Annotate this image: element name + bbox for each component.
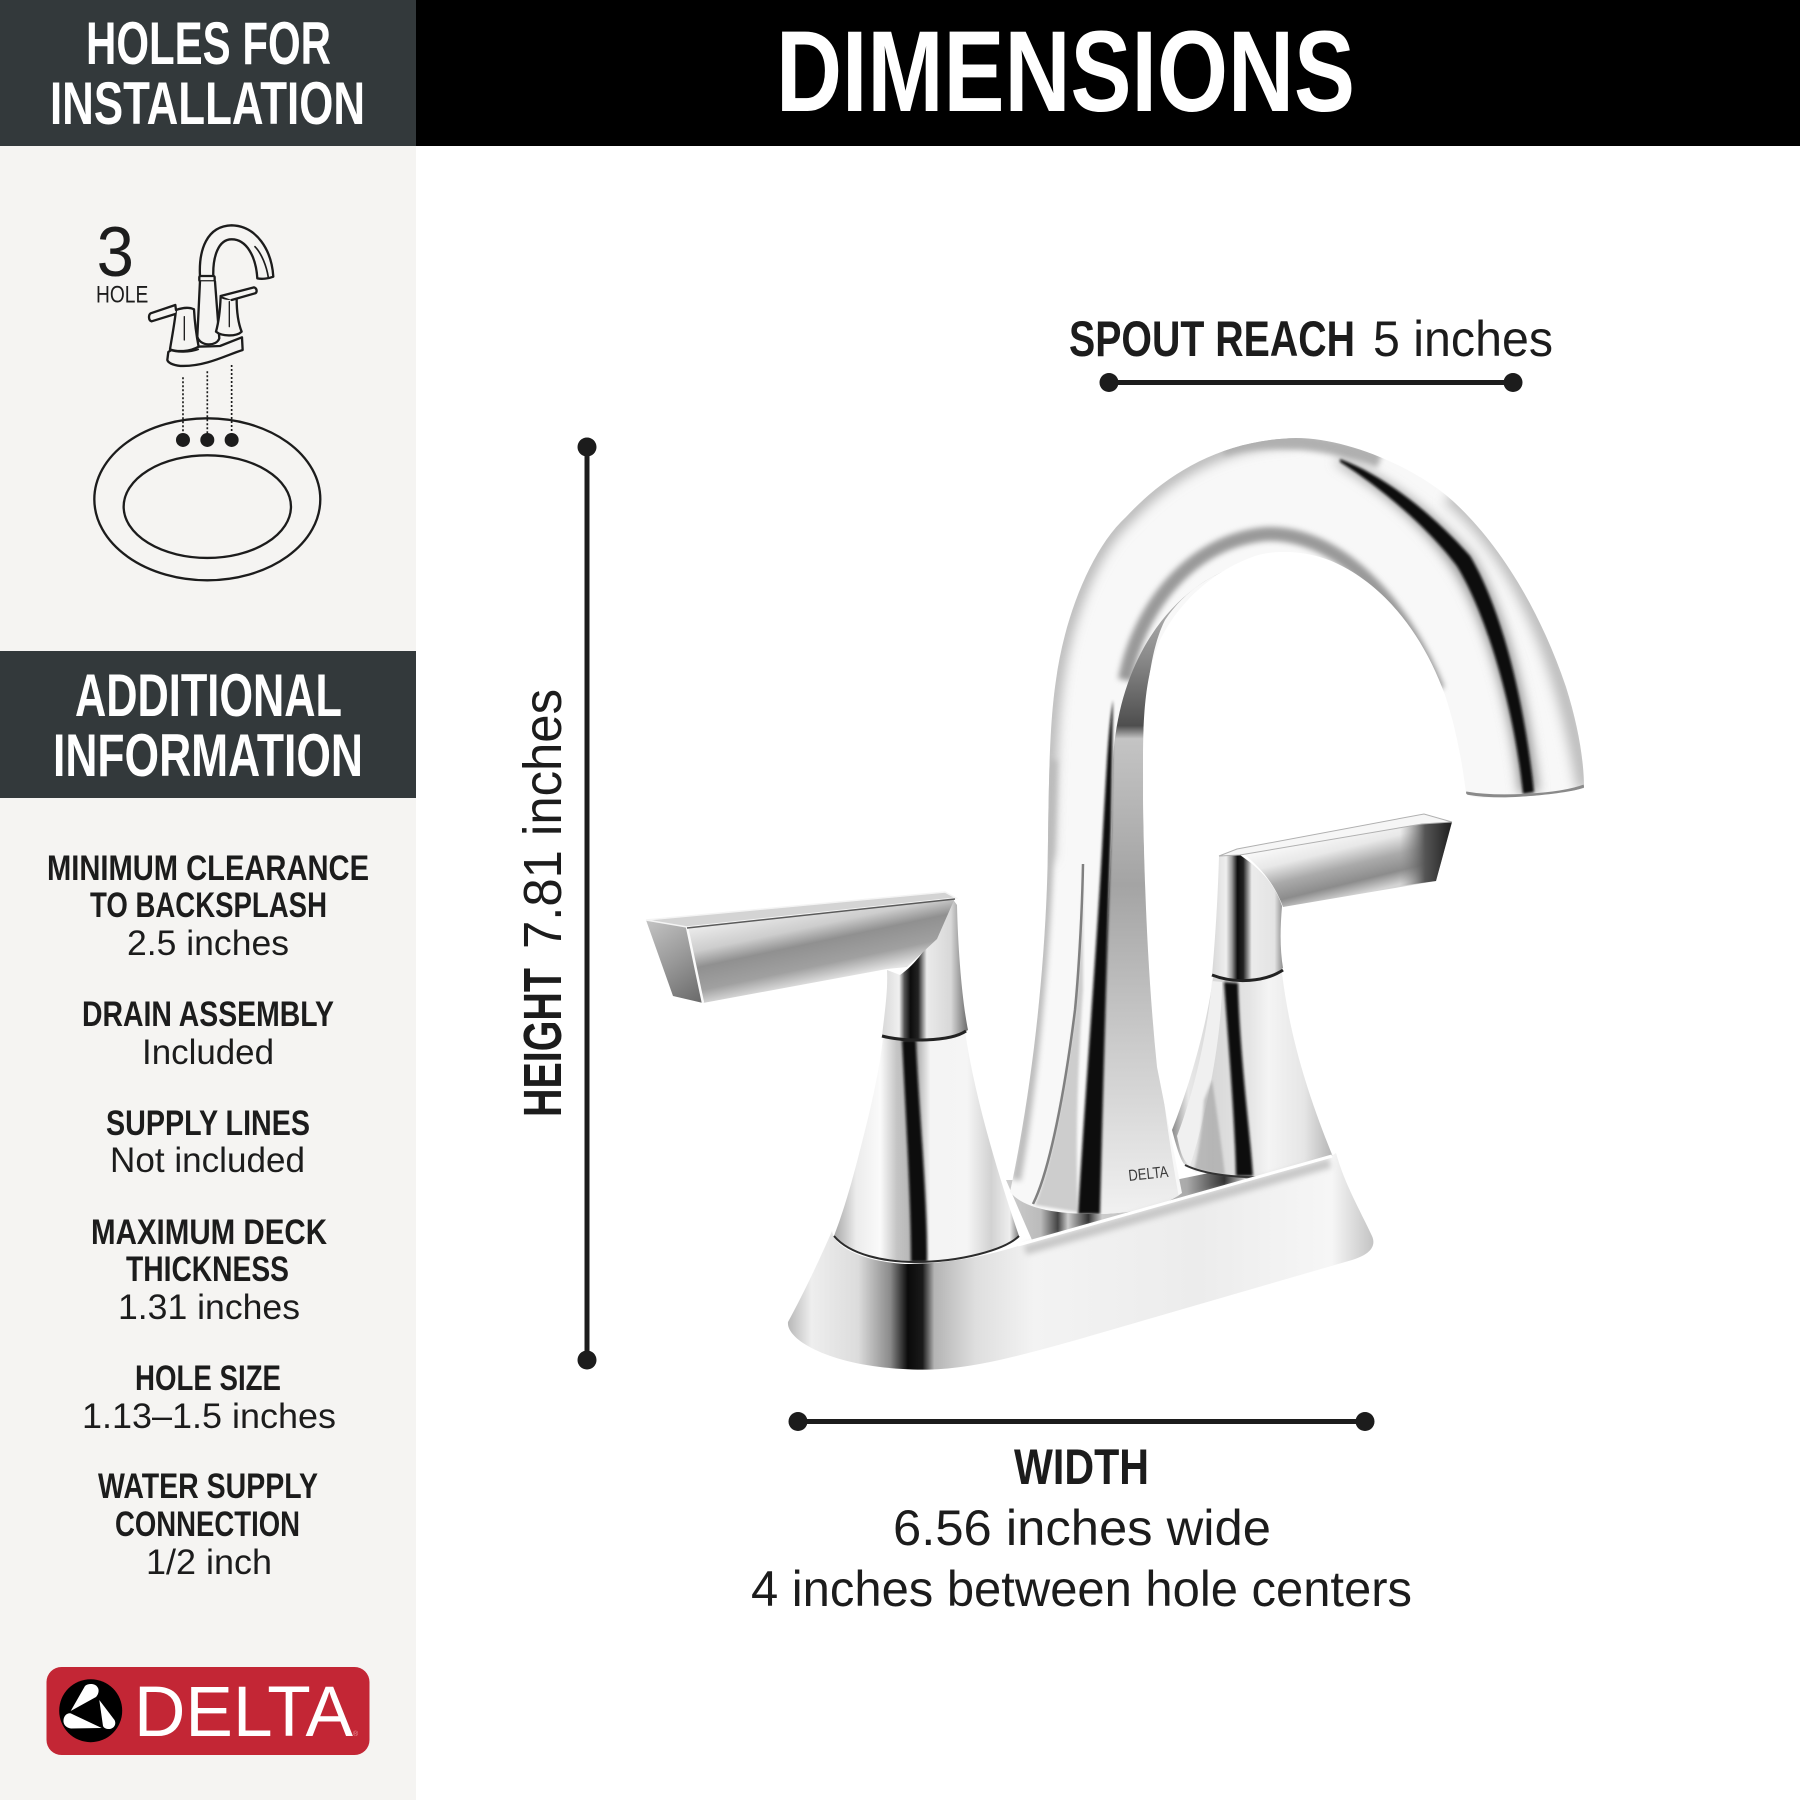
heading: additional information: ADDITIONAL bbox=[75, 662, 342, 729]
spec: maximum deck thickness: THICKNESS bbox=[126, 1250, 289, 1289]
label: 3 hole bbox=[96, 212, 148, 308]
spec: minimum clearance: 2.5 inches bbox=[127, 924, 289, 963]
logo: Delta bbox=[46, 1667, 370, 1755]
icon: three-hole faucet over sink bbox=[94, 212, 320, 580]
title: DIMENSIONS bbox=[776, 8, 1355, 136]
spec: minimum clearance: TO BACKSPLASH bbox=[90, 886, 327, 925]
installation holes bbox=[176, 433, 239, 447]
dimension: width: 4 inches between hole centers bbox=[751, 1561, 1412, 1617]
dimension: height: HEIGHT bbox=[513, 968, 573, 1117]
faucet outline bbox=[149, 225, 273, 366]
left knob bbox=[834, 1031, 1019, 1262]
panel: sidebar bbox=[0, 0, 416, 1800]
spec: supply lines: Not included bbox=[110, 1141, 305, 1180]
dotted guide lines bbox=[183, 365, 232, 433]
dimension: spout reach: 5 inches bbox=[1373, 311, 1553, 367]
spec: hole size bbox=[82, 1359, 336, 1436]
dimension: height bbox=[513, 438, 596, 1370]
panel: title bar bbox=[416, 0, 1800, 146]
heading: holes for installation bbox=[0, 0, 416, 146]
heading: holes for installation: HOLES FOR bbox=[86, 10, 331, 77]
dimension: width bbox=[751, 1412, 1412, 1617]
DELTA mark on spout: DELTA bbox=[1128, 1164, 1169, 1185]
base plate bbox=[788, 1153, 1373, 1370]
label: 3 hole: HOLE bbox=[96, 281, 148, 308]
sink outer rim bbox=[94, 418, 320, 580]
spout bbox=[990, 420, 1600, 1230]
rear deck bbox=[1006, 1150, 1334, 1240]
right lever bbox=[1219, 814, 1452, 907]
heading: additional information bbox=[0, 651, 416, 798]
spec: water supply connection: CONNECTION bbox=[115, 1505, 300, 1544]
spec: supply lines bbox=[106, 1104, 310, 1180]
spec: minimum clearance: MINIMUM CLEARANCE bbox=[47, 849, 369, 888]
dimension: spout reach bbox=[1069, 311, 1553, 392]
right knob bbox=[1172, 855, 1333, 1177]
spec: drain assembly: DRAIN ASSEMBLY bbox=[82, 995, 334, 1034]
left lever bbox=[646, 892, 968, 1040]
spec: water supply connection: WATER SUPPLY bbox=[98, 1467, 318, 1506]
label: 3 hole: 3 bbox=[97, 212, 134, 291]
spec: supply lines: SUPPLY LINES bbox=[106, 1104, 310, 1143]
product: chrome faucet bbox=[646, 420, 1600, 1370]
spec: maximum deck thickness bbox=[91, 1213, 327, 1327]
spec: minimum clearance bbox=[47, 849, 369, 963]
logo: Delta: DELTA bbox=[134, 1673, 354, 1752]
spec: drain assembly bbox=[82, 995, 334, 1072]
spec: water supply connection: 1/2 inch bbox=[146, 1543, 272, 1582]
sink basin bbox=[124, 455, 291, 558]
heading: additional information: INFORMATION bbox=[53, 722, 363, 789]
dimension: width: WIDTH bbox=[1014, 1439, 1149, 1495]
dimension: width: 6.56 inches wide bbox=[893, 1500, 1271, 1556]
spec: maximum deck thickness: MAXIMUM DECK bbox=[91, 1213, 327, 1252]
spec: hole size: 1.13–1.5 inches bbox=[82, 1397, 336, 1436]
dimension: spout reach: SPOUT REACH bbox=[1069, 311, 1355, 367]
spec: water supply connection bbox=[98, 1467, 318, 1582]
dimension: height: 7.81 inches bbox=[513, 689, 573, 949]
spec: drain assembly: Included bbox=[142, 1033, 274, 1072]
spec: maximum deck thickness: 1.31 inches bbox=[118, 1288, 300, 1327]
logo: Delta: ® bbox=[353, 1730, 359, 1738]
heading: holes for installation: INSTALLATION bbox=[50, 70, 365, 137]
spec: hole size: HOLE SIZE bbox=[135, 1359, 281, 1398]
